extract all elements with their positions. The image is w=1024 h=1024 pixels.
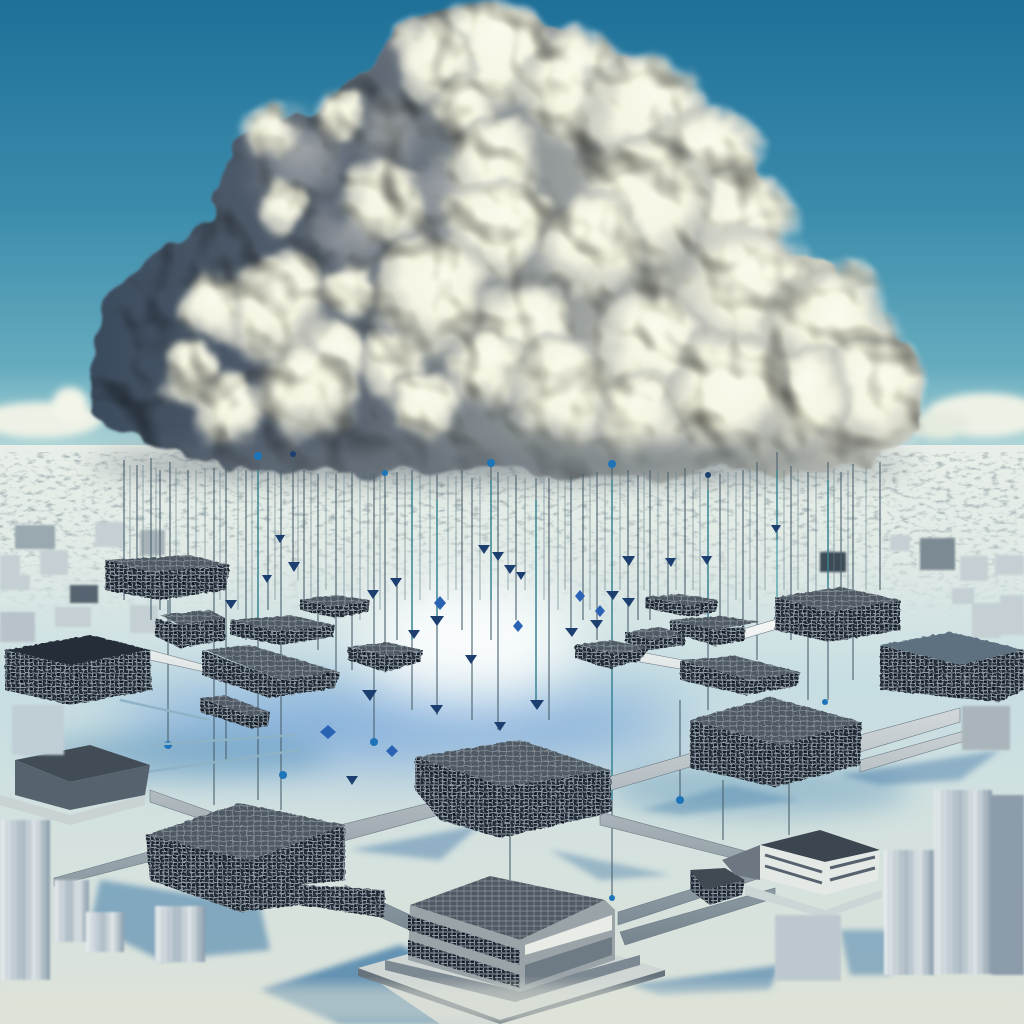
sky [0, 0, 1024, 460]
dark back puffs [240, 90, 510, 290]
blue reflection on ground [30, 580, 910, 816]
data centre: lower-left block [146, 803, 385, 918]
data centre: central block [415, 740, 612, 838]
data centre: upper right block [775, 587, 900, 642]
data centre: foreground plinth and block [358, 876, 665, 1024]
cloud [88, 0, 928, 474]
tower: left large [0, 820, 50, 980]
distant city texture [0, 452, 1024, 622]
thin wires [124, 452, 880, 900]
data centre: left block [5, 635, 152, 705]
data wires [124, 451, 880, 901]
tower: short centre-left [155, 906, 205, 962]
data centre: far left block [105, 555, 230, 600]
foreground blur [0, 985, 1024, 1024]
tower: right small [884, 850, 934, 975]
data centre: right block [690, 697, 862, 787]
tower: right large [934, 790, 992, 974]
tower: low right [775, 915, 841, 981]
tower: far right [992, 795, 1024, 975]
wire markers [164, 451, 828, 901]
fine upper wires [130, 465, 866, 620]
network pipes [54, 612, 975, 945]
data centre: far right block [880, 632, 1024, 702]
lit puffs [158, 0, 928, 470]
tower: upper left [12, 705, 64, 755]
teal wires [258, 470, 828, 800]
data centre: lower-left light block [0, 745, 150, 825]
cloud silhouette [88, 9, 925, 474]
horizon clouds [0, 387, 1024, 439]
metallic towers [0, 705, 1024, 981]
tower: short left [86, 912, 124, 952]
tower: mid right [962, 706, 1010, 750]
data centre: right low block with windows [690, 830, 882, 918]
data centre: upper small modules [155, 594, 800, 728]
tower: left small [54, 880, 89, 942]
cloud underside shadow [90, 450, 910, 478]
ground plane [0, 445, 1024, 1024]
distant small buildings [0, 522, 1024, 642]
ground shadows [90, 750, 1000, 1024]
